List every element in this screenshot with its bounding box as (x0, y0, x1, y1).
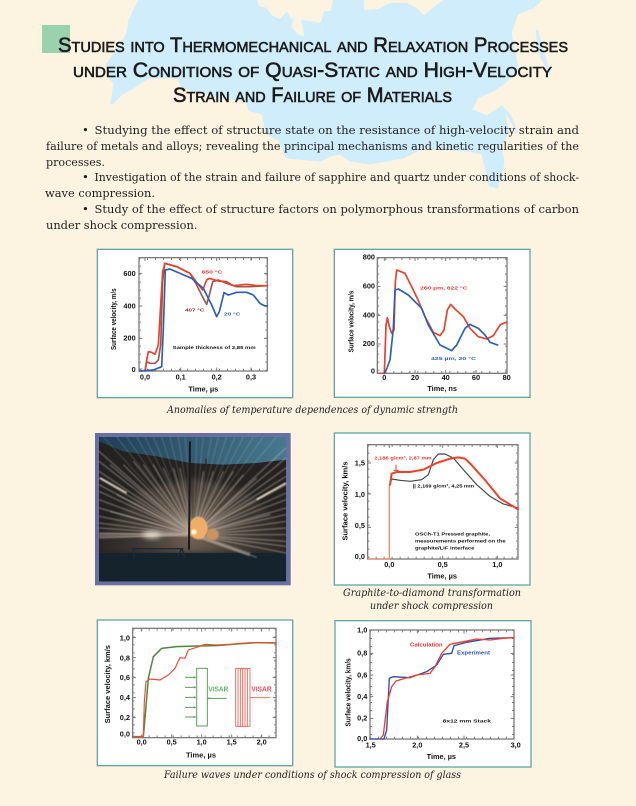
chart: graphite-to-diamond: 2,186 g/cm³, 2,87 mm (374, 456, 432, 462)
chart: surface velocity vs time, sample 2.85 mm: Surface velocity, m/s (109, 288, 118, 350)
body text: research topics: • (82, 202, 89, 216)
chart: surface velocity vs time, sample 2.85 mm: 650 °C (202, 269, 223, 275)
chart: failure waves with VISAR diagram: 0,8 (120, 653, 130, 662)
caption: anomalies: Anomalies of temperature dependences of dynamic strength (166, 404, 458, 416)
chart: calculation vs experiment: Calculation (410, 643, 443, 649)
title: Studies into Thermomechanical and Relaxation Processes (58, 34, 568, 57)
chart: surface velocity vs time, sample 2.85 mm: 0 (132, 365, 136, 374)
chart: calculation vs experiment: 3,0 (511, 740, 521, 749)
chart: surface velocity vs time, ns: 600 (363, 281, 375, 290)
chart: surface velocity vs time, ns: 425 µm, 20 °C (431, 356, 477, 362)
chart: graphite-to-diamond: graphite/LiF interface (415, 546, 475, 552)
title (58, 34, 568, 107)
chart: surface velocity vs time, sample 2.85 mm: 600 (123, 269, 136, 278)
chart: calculation vs experiment: 0,0 (357, 734, 367, 743)
chart: surface velocity vs time, ns (334, 249, 530, 397)
chart: failure waves with VISAR diagram: 1,0 (120, 633, 130, 642)
green accent square (42, 25, 70, 53)
chart: surface velocity vs time, sample 2.85 mm: Time, µs (188, 385, 218, 394)
chart: calculation vs experiment: 2,5 (459, 740, 469, 749)
chart: calculation vs experiment: Experiment (457, 651, 490, 657)
chart: failure waves with VISAR diagram: 0,2 (120, 713, 130, 722)
chart: surface velocity vs time, sample 2.85 mm: 400 (123, 301, 136, 310)
chart: graphite-to-diamond: 0,5 (438, 560, 448, 569)
chart: failure waves with VISAR diagram: Time, µs (186, 751, 216, 760)
chart: calculation vs experiment: 2,0 (412, 740, 422, 749)
diagram: VISAR samples: VISAR (251, 685, 272, 694)
chart: failure waves with VISAR diagram: Surface velocity, km/s (103, 645, 112, 723)
chart: failure waves with VISAR diagram: 2,0 (257, 737, 267, 746)
chart: graphite-to-diamond (334, 433, 530, 585)
chart: failure waves with VISAR diagram: 0,4 (120, 693, 131, 702)
chart: surface velocity vs time, ns: Time, ns (427, 384, 457, 393)
chart: failure waves with VISAR diagram: 1,5 (227, 737, 237, 746)
caption: graphite-to-diamond (343, 587, 521, 612)
chart: calculation vs experiment: 1,0 (357, 625, 367, 634)
chart: graphite-to-diamond: Time, µs (427, 572, 457, 581)
chart: calculation vs experiment: 0,6 (357, 671, 367, 680)
chart: surface velocity vs time, ns: 400 (363, 310, 375, 319)
chart: calculation vs experiment: 0,2 (357, 714, 367, 723)
chart: graphite-to-diamond: 0,5 (355, 521, 365, 530)
body text: research topics: Study of the effect of structure factors on polymorphous transformations of carbon (94, 202, 580, 216)
chart: surface velocity vs time, ns: Surface velocity, m/s (346, 291, 355, 352)
chart: graphite-to-diamond: 1,0 (355, 490, 365, 499)
chart: surface velocity vs time, ns: 260 µm, 622 °C (420, 285, 468, 291)
chart: failure waves with VISAR diagram: 1,0 (197, 737, 207, 746)
chart: surface velocity vs time, ns: 0 (371, 366, 375, 375)
chart: failure waves with VISAR diagram: 0,0 (137, 737, 147, 746)
chart: surface velocity vs time, ns: 0 (382, 373, 386, 382)
body text: research topics (45, 123, 580, 232)
chart: calculation vs experiment: Time, µs (427, 752, 456, 761)
body text: research topics: failure of metals and alloys; revealing the principal mechanisms and kinetic regularities of the (46, 139, 579, 153)
chart: graphite-to-diamond: 1,5 (355, 459, 365, 468)
chart: graphite-to-diamond: 1,0 (492, 560, 502, 569)
chart: failure waves with VISAR diagram: 0,5 (167, 737, 177, 746)
chart: graphite-to-diamond: Surface velocity, km/s (341, 461, 350, 541)
photo: explosion experiment (95, 433, 291, 585)
body text: research topics: under shock compression. (46, 218, 198, 232)
chart: surface velocity vs time, sample 2.85 mm: 0,3 (246, 372, 256, 381)
chart: graphite-to-diamond: 0,0 (384, 560, 394, 569)
caption: graphite-to-diamond: under shock compression (370, 600, 493, 612)
chart: graphite-to-diamond: 0,0 (355, 552, 365, 561)
caption: failure waves: Failure waves under conditions of shock compression of glass (163, 769, 461, 781)
chart: graphite-to-diamond: || 2,169 g/cm³, 4,25 mm (413, 483, 475, 489)
chart: surface velocity vs time, ns: 40 (442, 373, 450, 382)
chart: calculation vs experiment: 1,5 (366, 740, 376, 749)
chart: surface velocity vs time, sample 2.85 mm: 0,2 (212, 372, 222, 381)
background world map (107, 0, 550, 187)
chart: failure waves with VISAR diagram: 0,6 (120, 673, 130, 682)
body text: research topics: Investigation of the strain and failure of sapphire and quartz under conditions of shock- (94, 170, 579, 184)
chart: calculation vs experiment: 0,8 (357, 649, 367, 658)
chart: surface velocity vs time, sample 2.85 mm: 0,1 (176, 372, 186, 381)
chart: failure waves with VISAR diagram: 0,0 (120, 730, 130, 739)
body text: research topics: processes. (46, 155, 105, 169)
chart: surface velocity vs time, sample 2.85 mm: 0,0 (140, 372, 150, 381)
diagram: VISAR samples: VISAR (208, 685, 229, 694)
chart: calculation vs experiment: 8x12 mm Stack (443, 719, 491, 725)
chart: surface velocity vs time, ns: 800 (363, 253, 375, 262)
chart: surface velocity vs time, sample 2.85 mm: 20 °C (224, 312, 241, 318)
chart: calculation vs experiment: Surface velocity, km/s (344, 658, 353, 727)
chart: calculation vs experiment: 0,4 (357, 692, 368, 701)
body text: research topics: wave compression. (45, 186, 155, 200)
title: under Conditions of Quasi-Static and High-Velocity (73, 59, 552, 82)
title: Strain and Failure of Materials (173, 84, 452, 107)
chart: surface velocity vs time, ns: 20 (411, 373, 419, 382)
diagram: VISAR samples (185, 668, 272, 726)
chart: surface velocity vs time, ns: 80 (503, 373, 511, 382)
chart: surface velocity vs time, sample 2.85 mm (97, 249, 293, 398)
body text: research topics: • (82, 123, 89, 137)
body text: research topics: Studying the effect of structure state on the resistance of high-velocity strain and (94, 123, 580, 137)
caption: graphite-to-diamond: Graphite-to-diamond transformation (343, 587, 521, 599)
body text: research topics: • (82, 170, 89, 184)
chart: surface velocity vs time, ns: 200 (363, 339, 375, 348)
chart: calculation vs experiment (335, 621, 531, 767)
chart: surface velocity vs time, sample 2.85 mm: 200 (123, 334, 136, 343)
chart: graphite-to-diamond: measurements performed on the (415, 539, 506, 545)
chart: surface velocity vs time, sample 2.85 mm: Sample thickness of 2,85 mm (173, 345, 256, 351)
chart: graphite-to-diamond: OSCh-T1 Pressed graphite, (415, 531, 491, 537)
chart: failure waves with VISAR diagram (97, 620, 293, 766)
chart: surface velocity vs time, sample 2.85 mm: 407 °C (185, 308, 205, 314)
chart: surface velocity vs time, ns: 60 (472, 373, 480, 382)
